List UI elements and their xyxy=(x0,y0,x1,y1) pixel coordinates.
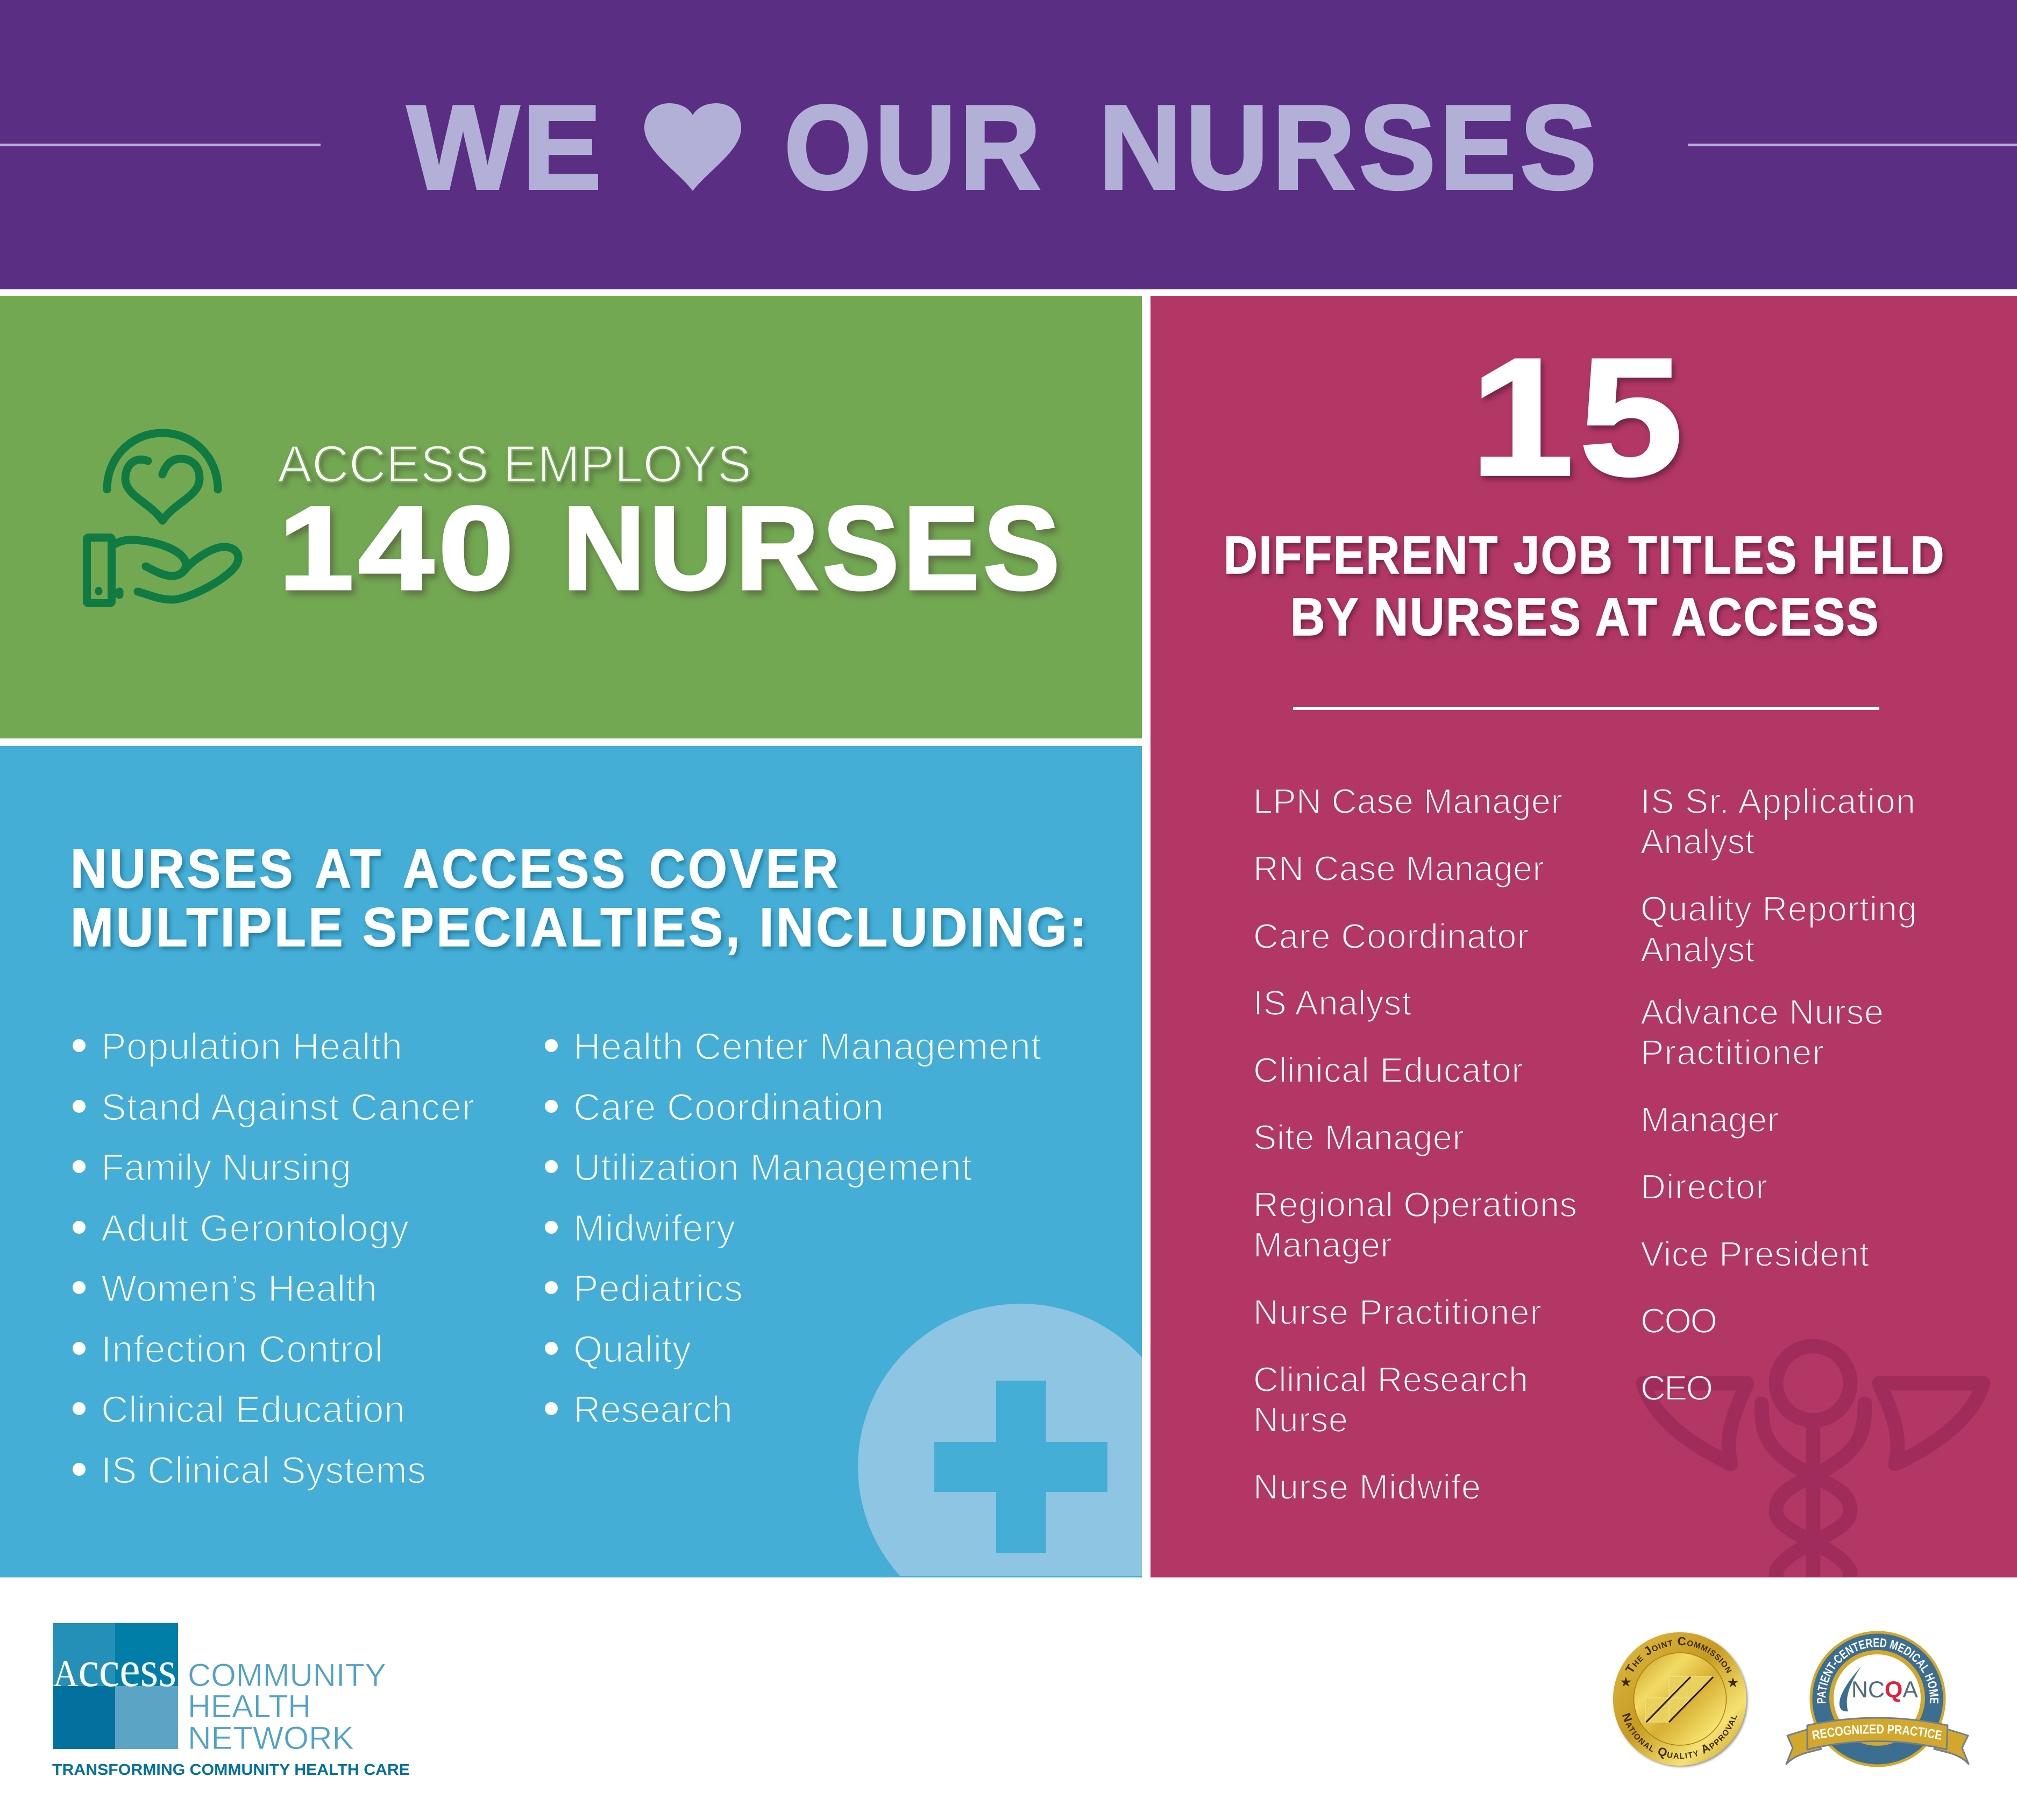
panel: nurse count xyxy=(0,296,1142,738)
seal text: ★ xyxy=(1728,1676,1738,1689)
specialties list: column 2: Midwifery xyxy=(573,1207,735,1249)
header banner xyxy=(0,0,2017,289)
specialties list: column 2: Pediatrics xyxy=(573,1267,743,1309)
job titles list: column 1: Nurse xyxy=(1253,1400,1348,1439)
job titles list: column 1: Site Manager xyxy=(1253,1118,1464,1157)
job titles list: column 1: Nurse Practitioner xyxy=(1253,1292,1542,1332)
specialties list: column 1: Clinical Education xyxy=(101,1389,405,1431)
text: 140 nurses: 140 xyxy=(279,482,519,614)
ribbon xyxy=(1786,1718,1969,1764)
panel: job titles xyxy=(1150,296,2017,1592)
specialties list: column 2: Health Center Management xyxy=(573,1025,1041,1067)
title xyxy=(407,81,1601,214)
job titles list: column 1: IS Analyst xyxy=(1253,983,1411,1022)
logo wordmark: Access xyxy=(53,1641,176,1697)
job titles heading: BY NURSES AT ACCESS xyxy=(1290,587,1880,646)
seal text: National Quality Approval xyxy=(1622,1712,1737,1759)
specialties list: column 1: IS Clinical Systems xyxy=(101,1449,426,1491)
title: NURSES xyxy=(1099,81,1601,214)
logo: Access Community Health Network xyxy=(52,1623,410,1779)
specialties list: column 2: Utilization Management xyxy=(573,1147,972,1189)
badge: NCQA recognized practice xyxy=(1786,1631,1970,1767)
job titles list: column 1: Clinical Educator xyxy=(1253,1050,1523,1090)
job titles list: column 2 xyxy=(1640,781,1917,1407)
job titles list: column 1: LPN Case Manager xyxy=(1253,781,1563,821)
text: 140 nurses xyxy=(279,482,1064,614)
specialties heading: NURSES AT ACCESS COVER xyxy=(70,838,841,899)
text: access employs: ACCESS EMPLOYS xyxy=(278,435,751,493)
badge: Joint Commission seal xyxy=(1613,1632,1749,1768)
specialties heading xyxy=(70,838,1089,958)
job titles list: column 1: RN Case Manager xyxy=(1253,849,1544,888)
specialties list: column 1: Women’s Health xyxy=(101,1267,377,1309)
logo organisation name: HEALTH xyxy=(188,1688,311,1724)
specialties list: column 1: Infection Control xyxy=(101,1328,383,1370)
logo tagline: TRANSFORMING COMMUNITY HEALTH CARE xyxy=(52,1761,410,1779)
specialties list: column 1: Stand Against Cancer xyxy=(101,1086,474,1128)
specialties heading: MULTIPLE SPECIALTIES, INCLUDING: xyxy=(70,897,1089,958)
seal text: ★ xyxy=(1621,1675,1631,1689)
job titles list: column 2: Analyst xyxy=(1640,930,1755,969)
logo organisation name: COMMUNITY xyxy=(188,1657,386,1693)
icon: hand holding heart xyxy=(87,433,238,603)
logo organisation name xyxy=(188,1657,386,1756)
job titles list: column 1: Clinical Research xyxy=(1253,1360,1528,1399)
specialties list: column 2 xyxy=(545,1025,1041,1431)
logo organisation name: NETWORK xyxy=(188,1720,354,1756)
ribbon text: RECOGNIZED PRACTICE xyxy=(1812,1724,1943,1740)
job titles list: column 2: Practitioner xyxy=(1640,1033,1824,1072)
seal text xyxy=(1621,1637,1738,1759)
specialties list: column 1 xyxy=(73,1025,474,1491)
text: 140 nurses: NURSES xyxy=(563,482,1064,614)
specialties list: column 2: Care Coordination xyxy=(573,1086,884,1128)
icon: caduceus watermark xyxy=(1643,1346,1983,1592)
specialties list: column 1: Family Nursing xyxy=(101,1147,351,1189)
job titles list: column 2: Quality Reporting xyxy=(1640,889,1917,928)
specialties list: column 1: Adult Gerontology xyxy=(101,1207,409,1249)
NCQA swoosh xyxy=(1840,1666,1862,1711)
panel: specialties xyxy=(0,746,1184,1630)
specialties list: column 2: Quality xyxy=(573,1328,691,1370)
job titles list: column 2: CEO xyxy=(1640,1368,1713,1407)
title: WE xyxy=(407,81,605,214)
NCQA ring text: PATIENT-CENTERED MEDICAL HOME xyxy=(1817,1638,1938,1704)
title: OUR xyxy=(784,81,1045,214)
job titles list: column 2: IS Sr. Application xyxy=(1640,781,1915,821)
job titles list: column 1: Nurse Midwife xyxy=(1253,1467,1481,1506)
job titles list: column 2: Manager xyxy=(1640,1100,1779,1139)
job titles heading xyxy=(1224,525,1945,646)
job titles list: column 1: Care Coordinator xyxy=(1253,916,1529,956)
job titles list: column 2: Director xyxy=(1640,1167,1767,1206)
job titles list: column 1: Manager xyxy=(1253,1225,1392,1264)
job titles list: column 1 xyxy=(1253,781,1577,1506)
icon: medical cross in circle xyxy=(858,1304,1142,1576)
job titles list: column 1: Regional Operations xyxy=(1253,1185,1577,1224)
job titles list: column 2: Analyst xyxy=(1640,822,1755,861)
job titles list: column 2: Vice President xyxy=(1640,1234,1869,1274)
big number 15: 15 xyxy=(1470,324,1688,511)
job titles list: column 2: Advance Nurse xyxy=(1640,992,1884,1032)
specialties list: column 1: Population Health xyxy=(101,1025,402,1067)
NCQA wordmark: NCQA xyxy=(1851,1677,1918,1703)
seal text: The Joint Commission xyxy=(1625,1637,1732,1674)
specialties list: column 2: Research xyxy=(573,1389,733,1431)
job titles list: column 2: COO xyxy=(1640,1301,1717,1340)
